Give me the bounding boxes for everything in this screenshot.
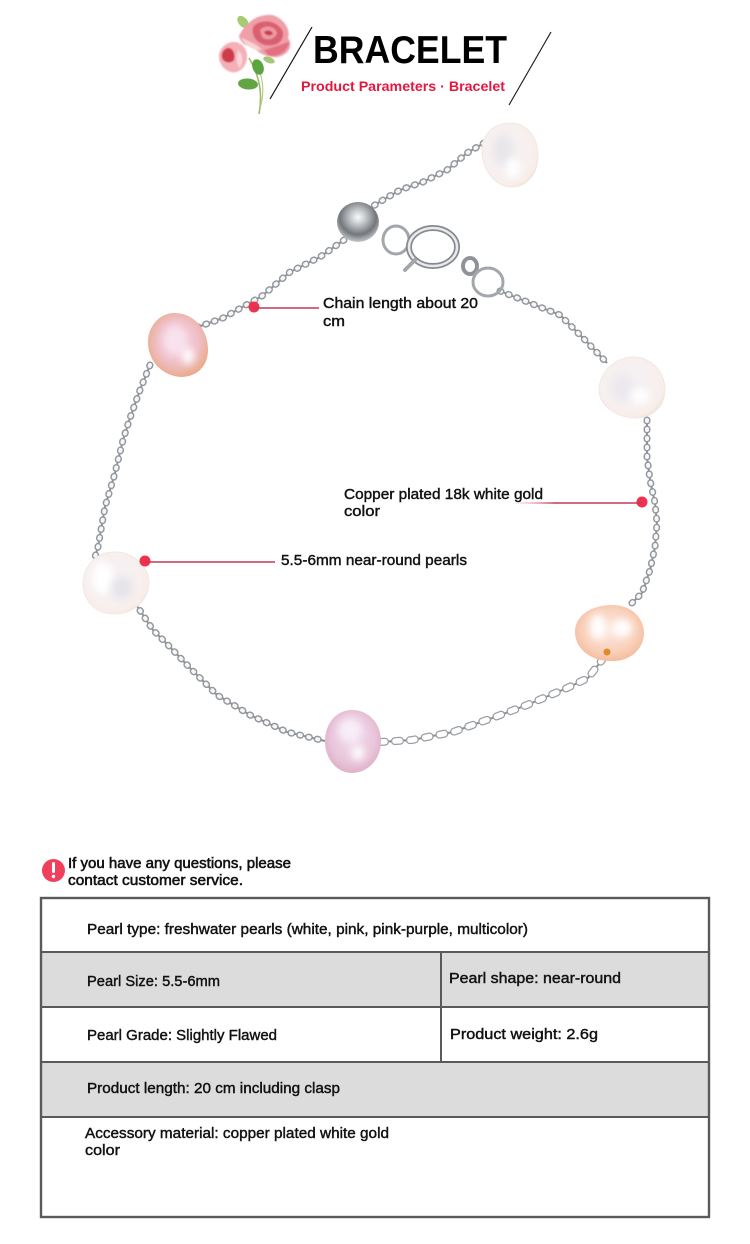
row: product length: Product length: 20 cm including clasp — [87, 1081, 340, 1097]
shaded rows — [41, 952, 709, 1007]
callout: chain length: Chain length about 20 — [323, 296, 478, 312]
icon: rose — [219, 14, 290, 114]
callout: plating: Copper plated 18k white gold — [344, 487, 543, 503]
clasp — [383, 226, 503, 296]
callout: plating — [344, 487, 648, 520]
table frame — [41, 898, 709, 1217]
callout: chain length — [248, 296, 478, 330]
row: pearl shape: Pearl shape: near-round — [449, 971, 621, 987]
row: product weight: Product weight: 2.6g — [450, 1027, 598, 1043]
notice text: contact customer service. — [68, 873, 243, 889]
row: pearl type: Pearl type: freshwater pearls (white, pink, pink-purple, multicolor) — [87, 922, 528, 938]
slash left — [270, 27, 312, 99]
row: accessory material: Accessory material: copper plated white gold — [85, 1126, 389, 1142]
parameters table — [41, 898, 709, 1217]
pearl: pink-purple — [325, 710, 381, 773]
callout: plating: color — [344, 504, 380, 520]
notice — [42, 856, 291, 889]
pearl: right white — [599, 357, 665, 418]
callout: pearl size — [140, 553, 467, 569]
callout: pearl size: 5.5-6mm near-round pearls — [281, 553, 467, 569]
notice text: If you have any questions, please — [68, 856, 291, 872]
row: pearl size: Pearl Size: 5.5-6mm — [87, 974, 220, 990]
parameters table: color — [85, 1143, 120, 1159]
pearl: peach — [575, 605, 644, 661]
title: BRACELET — [313, 29, 507, 72]
icon: exclamation — [42, 859, 65, 882]
subtitle: Product Parameters · Bracelet — [301, 78, 505, 94]
pearl: left white — [83, 552, 149, 614]
header — [219, 14, 551, 114]
row: pearl grade: Pearl Grade: Slightly Flawed — [87, 1028, 277, 1044]
chain — [95, 143, 657, 742]
pearl: pink — [148, 313, 208, 377]
slider bead — [337, 202, 379, 242]
slash right — [509, 32, 551, 105]
pearl: top white — [482, 123, 538, 187]
notice text — [68, 856, 291, 889]
bracelet illustration — [83, 123, 665, 773]
callout: chain length: cm — [323, 314, 345, 330]
